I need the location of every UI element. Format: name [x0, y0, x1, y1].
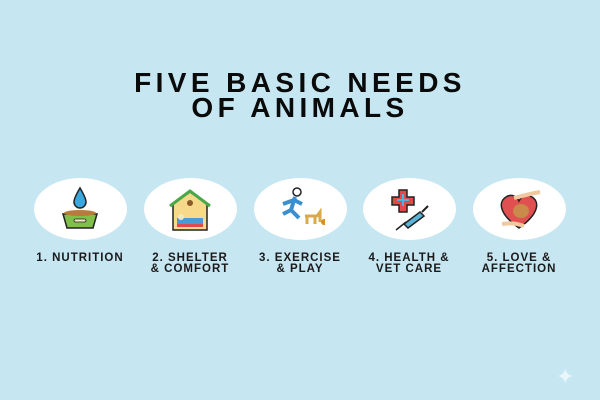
label 5: 5. LOVE &: [487, 252, 551, 264]
title: FIVE BASIC NEEDS: [134, 67, 466, 98]
label 4: VET CARE: [376, 263, 442, 275]
label 3: 3. EXERCISE: [259, 252, 341, 264]
label 2: [151, 252, 229, 275]
label 2: 2. SHELTER: [152, 252, 228, 264]
icon: exercise: [254, 178, 347, 240]
label 3: [259, 252, 341, 275]
icon: shelter: [144, 178, 237, 240]
icon: nutrition: [34, 178, 127, 240]
label 4: [368, 252, 450, 275]
icon: love: [473, 178, 566, 240]
title: OF ANIMALS: [191, 92, 409, 123]
icon: health: [363, 178, 456, 240]
label 3: & PLAY: [276, 263, 324, 275]
label 1: 1. NUTRITION: [36, 252, 124, 264]
title: [134, 67, 466, 123]
label 2: & COMFORT: [151, 263, 229, 275]
sparkle: ✦: [556, 364, 574, 389]
label 5: [482, 252, 556, 275]
label 5: AFFECTION: [482, 263, 556, 275]
label 4: 4. HEALTH &: [368, 252, 450, 264]
